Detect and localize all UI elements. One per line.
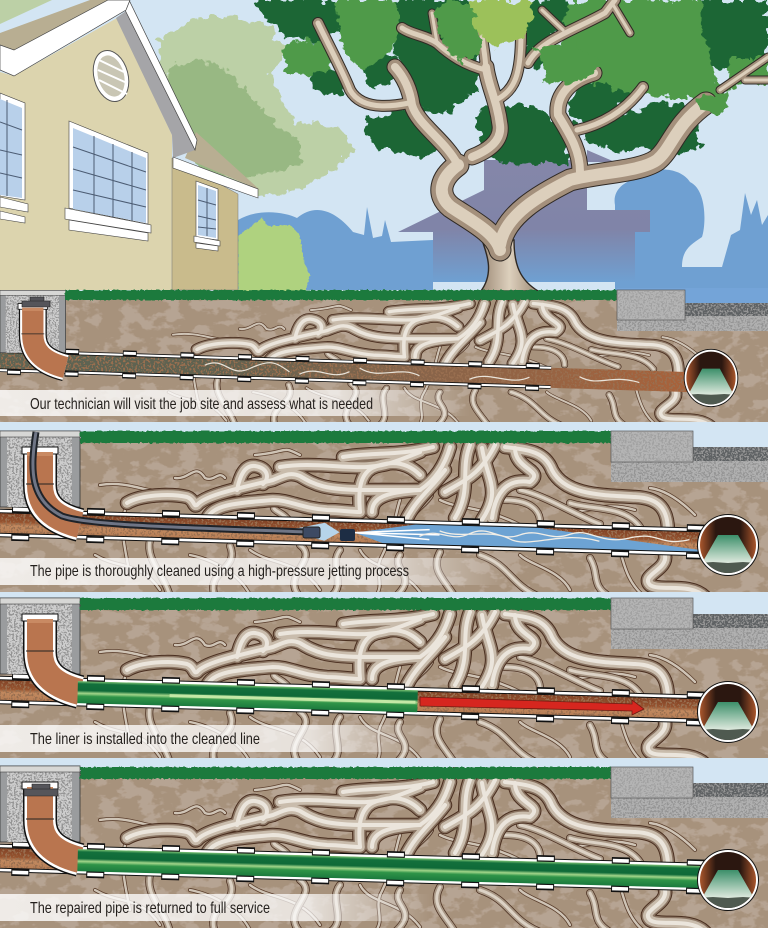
- sewer main cross-section: [684, 349, 738, 408]
- gable vent: [88, 46, 134, 106]
- pipe walls: [0, 844, 720, 891]
- manhole: [0, 766, 80, 860]
- sky behind road: [693, 597, 768, 615]
- pipe interior: [0, 846, 705, 889]
- background house silhouette: [398, 150, 650, 282]
- green liner: [77, 681, 418, 712]
- distant blue shrubs: [238, 169, 768, 290]
- tree trunk and branches: [318, 0, 768, 291]
- manhole: [0, 598, 80, 692]
- wing window: [194, 181, 220, 251]
- curb and gravel: [617, 290, 768, 331]
- curb and gravel: [611, 598, 768, 649]
- grass: [65, 290, 617, 300]
- gable rake fascia: [124, 0, 197, 150]
- caption: The liner is installed into the cleaned line: [30, 731, 260, 748]
- grass: [80, 598, 611, 610]
- pipe walls: [0, 349, 551, 389]
- caption band: [0, 558, 510, 585]
- background tree: [158, 17, 354, 195]
- tree roots: [95, 780, 705, 928]
- sky band: [0, 592, 768, 599]
- panel 4: returned to service: [0, 758, 768, 928]
- wing fascia: [173, 157, 258, 198]
- caption: Our technician will visit the job site and assess what is needed: [30, 396, 373, 413]
- foliage of big tree, back layer: [255, 0, 768, 165]
- pipe walls: [0, 509, 720, 556]
- house roof: [0, 0, 108, 50]
- panel 2: jetting: [0, 422, 768, 597]
- pipe walls: [0, 676, 720, 723]
- gable soffit: [116, 11, 195, 158]
- pipe interior: [0, 678, 705, 721]
- road asphalt: [693, 783, 768, 798]
- road asphalt: [685, 303, 768, 317]
- foliage of big tree, front clumps: [437, 0, 731, 115]
- left window: [0, 93, 28, 223]
- road asphalt: [693, 447, 768, 462]
- pipe interior with water spray: [0, 511, 705, 554]
- caption band: [0, 894, 430, 921]
- cleanout cap: [22, 297, 50, 307]
- curb and gravel: [611, 767, 768, 818]
- soil: [0, 605, 768, 758]
- road asphalt: [693, 614, 768, 629]
- red arrow: [420, 697, 644, 715]
- shrub: [238, 218, 310, 290]
- front gable fascia: [0, 0, 130, 76]
- green liner: [77, 849, 704, 888]
- jetting nozzle: [303, 527, 355, 541]
- soil: [0, 295, 768, 422]
- house wing roof: [185, 132, 260, 190]
- grass: [80, 767, 611, 779]
- jetting hose: [33, 432, 305, 532]
- cleanout cap: [24, 784, 58, 796]
- panel 1: assessment: [0, 288, 768, 427]
- tree roots: [95, 612, 705, 764]
- house wing wall: [172, 158, 238, 290]
- sewer main cross-section: [697, 849, 759, 912]
- illustration: house and tree scene: [0, 0, 768, 291]
- pipe interior: [0, 351, 695, 392]
- grass: [80, 431, 611, 443]
- corner foliage: [0, 0, 52, 24]
- sky behind road: [693, 430, 768, 448]
- house main wall: [0, 18, 172, 290]
- foliage of big tree, mid layer: [283, 0, 768, 98]
- tree roots: [169, 302, 711, 427]
- center window: [65, 121, 151, 241]
- sewer main cross-section: [697, 514, 759, 577]
- manhole: [0, 431, 80, 525]
- sky band: [0, 758, 768, 767]
- sky behind road: [693, 765, 768, 783]
- caption: The repaired pipe is returned to full service: [30, 900, 270, 917]
- sewer main cross-section: [697, 681, 759, 744]
- sky behind road: [617, 288, 768, 304]
- panel 3: liner install: [0, 592, 768, 764]
- tree roots: [95, 445, 705, 597]
- sky band: [0, 422, 768, 432]
- curb and gravel: [611, 431, 768, 482]
- soil: [0, 438, 768, 592]
- caption band: [0, 390, 470, 416]
- manhole with cleanout: [0, 290, 66, 368]
- caption: The pipe is thoroughly cleaned using a high-pressure jetting process: [30, 563, 409, 580]
- soil: [0, 773, 768, 928]
- caption band: [0, 725, 430, 752]
